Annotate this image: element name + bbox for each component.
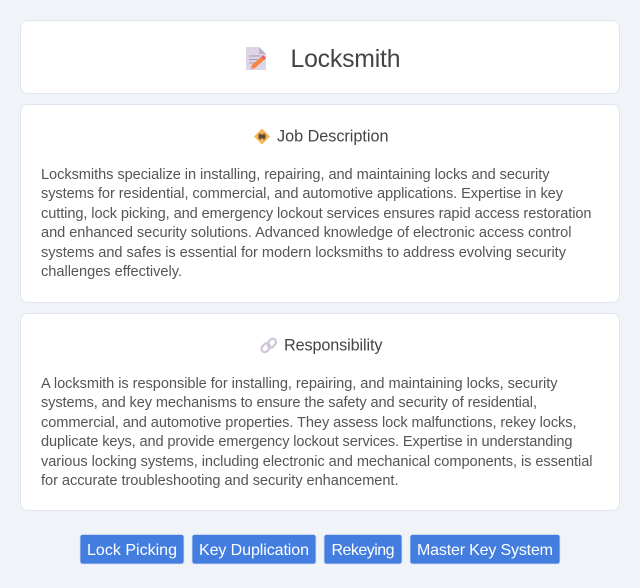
text block: job description: cutting, lock picking, and emergency lockout services ensures rapid access restoration [41, 206, 592, 222]
icon: chain link [260, 337, 277, 353]
heading: Locksmith: Locksmith [290, 46, 400, 73]
tag: Lock Picking: Lock Picking [87, 542, 177, 559]
tag: Master Key System: Master Key System [417, 542, 553, 559]
text block: responsibility [41, 376, 592, 489]
heading: Job Description: Job Description [277, 128, 388, 146]
text block: job description: and enhanced security solutions. Advanced knowledge of electronic access control [41, 225, 572, 241]
panel: title [20, 20, 620, 94]
tag: Lock Picking [80, 534, 184, 564]
heading: Responsibility: Responsibility [284, 336, 383, 354]
icon: memo with pencil [246, 47, 266, 70]
text block: responsibility: various locking systems, including electronic and mechanical components, is essential [41, 454, 592, 470]
icon: construction diamond [254, 128, 270, 144]
text block: responsibility: systems, and key mechanisms to ensure the safety and security of residential, [41, 395, 537, 411]
tag: Key Duplication [192, 534, 316, 564]
text block: responsibility: A locksmith is responsible for installing, repairing, and maintaining locks, security [41, 376, 558, 392]
text block: job description: systems and safes is essential for modern locksmiths to address evolving security [41, 245, 567, 261]
tag: Rekeying [324, 534, 402, 564]
text block: job description: Locksmiths specialize in installing, repairing, and maintaining locks and security [41, 167, 550, 183]
text block: job description [41, 167, 592, 280]
tags row [80, 534, 560, 564]
tag: Rekeying: Rekeying [332, 542, 394, 559]
panel: responsibility [20, 314, 620, 510]
text block: job description: challenges effectively. [41, 264, 182, 280]
text block: responsibility: for accurate troubleshooting and security enhancement. [41, 473, 398, 489]
text block: responsibility: duplicate keys, and provide emergency lockout services. Expertise in understanding [41, 434, 572, 450]
tag: Master Key System [410, 534, 560, 564]
panel: job description [20, 104, 620, 302]
text block: job description: systems for residential, commercial, and automotive applications. Expertise in key [41, 186, 564, 202]
text block: responsibility: commercial, and automotive properties. They assess lock malfunctions, rekey locks, [41, 415, 576, 431]
tag: Key Duplication: Key Duplication [199, 542, 309, 559]
